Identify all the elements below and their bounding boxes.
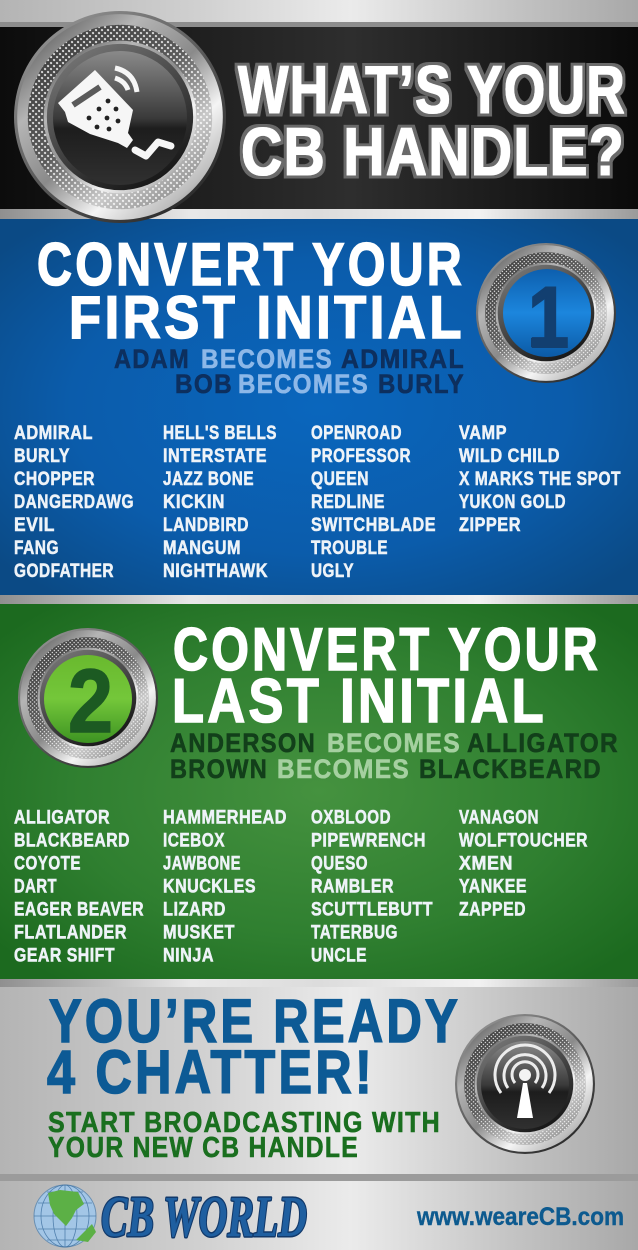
list: first initial names: VAMP: [459, 423, 507, 444]
list: first initial names: CHOPPER: [14, 469, 95, 490]
list: first initial names: DANGERDAWG: [14, 492, 134, 513]
logo: globe: [34, 1185, 96, 1247]
list: last initial names: OXBLOOD: [311, 808, 391, 828]
list: last initial names: PIPEWRENCH: [311, 830, 426, 852]
example text: last initial: BECOMES: [277, 754, 410, 784]
list: first initial names: WILD CHILD: [459, 446, 560, 467]
list: first initial names: SWITCHBLADE: [311, 515, 436, 536]
heading: you're ready 4 chatter: YOU’RE READY: [49, 987, 461, 1055]
heading: convert your first initial: CONVERT YOUR: [37, 231, 465, 298]
example text: last initial: BROWN: [170, 754, 268, 784]
panel: ready grey: [0, 979, 638, 1174]
heading: you're ready 4 chatter: 4 CHATTER!: [47, 1038, 375, 1106]
list: last initial names: GEAR SHIFT: [14, 946, 115, 966]
list: first initial names: FANG: [14, 538, 59, 559]
list: last initial names: [14, 808, 588, 966]
subheading: start broadcasting: YOUR NEW CB HANDLE: [48, 1132, 359, 1164]
list: first initial names: MANGUM: [163, 538, 241, 559]
list: first initial names: GODFATHER: [14, 561, 114, 582]
heading: you're ready 4 chatter: [47, 987, 461, 1106]
list: first initial names: QUEEN: [311, 469, 369, 490]
list: last initial names: NINJA: [163, 946, 214, 966]
list: first initial names: [14, 423, 621, 582]
example text: first initial: BECOMES: [238, 369, 369, 399]
icon: number 2 badge: 2: [68, 652, 113, 752]
subheading: start broadcasting: START BROADCASTING WITH: [48, 1107, 441, 1139]
heading: convert your first initial: [37, 231, 465, 351]
list: last initial names: MUSKET: [163, 922, 235, 944]
example text: first initial: [114, 344, 465, 399]
icon: number 1 badge: 1: [528, 270, 569, 366]
panel: step 1 blue: [0, 219, 638, 595]
list: last initial names: ZAPPED: [459, 900, 526, 920]
heading: convert your first initial: FIRST INITIAL: [69, 284, 465, 351]
list: first initial names: REDLINE: [311, 492, 385, 513]
list: last initial names: FLATLANDER: [14, 922, 127, 944]
list: first initial names: PROFESSOR: [311, 446, 411, 467]
list: first initial names: NIGHTHAWK: [163, 561, 268, 582]
example text: last initial: BECOMES: [327, 728, 461, 758]
example text: first initial: BURLY: [378, 369, 465, 399]
list: last initial names: RAMBLER: [311, 876, 394, 898]
list: last initial names: XMEN: [459, 854, 513, 874]
list: last initial names: YANKEE: [459, 876, 527, 898]
list: first initial names: INTERSTATE: [163, 446, 267, 467]
title: [238, 52, 626, 190]
example text: last initial: ANDERSON: [170, 728, 316, 758]
list: first initial names: LANDBIRD: [163, 515, 249, 536]
list: first initial names: ZIPPER: [459, 515, 521, 536]
heading: convert your last initial: [172, 616, 601, 736]
list: last initial names: VANAGON: [459, 808, 539, 828]
list: first initial names: UGLY: [311, 561, 354, 582]
example text: first initial: BECOMES: [201, 344, 333, 374]
icon: CB microphone badge: [14, 11, 226, 223]
list: first initial names: KICKIN: [163, 492, 225, 513]
example text: last initial: ALLIGATOR: [467, 728, 619, 758]
list: last initial names: COYOTE: [14, 854, 81, 874]
list: last initial names: DART: [14, 876, 57, 898]
list: last initial names: JAWBONE: [163, 854, 241, 874]
list: last initial names: UNCLE: [311, 946, 367, 966]
subheading: start broadcasting: [48, 1107, 441, 1164]
list: last initial names: BLACKBEARD: [14, 830, 130, 852]
example text: last initial: [170, 728, 619, 784]
list: last initial names: TATERBUG: [311, 922, 398, 944]
icon: number 1 badge: [476, 243, 616, 383]
example text: first initial: ADMIRAL: [341, 344, 465, 374]
list: first initial names: OPENROAD: [311, 423, 402, 444]
top silver strip: [0, 0, 638, 24]
icon: number 2 badge: [18, 628, 158, 768]
header black panel: [0, 22, 638, 219]
list: last initial names: WOLFTOUCHER: [459, 830, 588, 852]
list: last initial names: ICEBOX: [163, 830, 225, 852]
heading: convert your last initial: LAST INITIAL: [172, 667, 547, 736]
list: first initial names: TROUBLE: [311, 538, 388, 559]
example text: first initial: ADAM: [114, 344, 190, 374]
list: last initial names: ALLIGATOR: [14, 808, 110, 828]
list: last initial names: LIZARD: [163, 900, 226, 920]
list: last initial names: KNUCKLES: [163, 876, 256, 898]
icon: broadcast tower badge: [455, 1014, 595, 1154]
list: last initial names: EAGER BEAVER: [14, 900, 144, 920]
list: first initial names: HELL'S BELLS: [163, 423, 277, 444]
list: first initial names: ADMIRAL: [14, 423, 93, 444]
logo: CB WORLD wordmark: CB WORLD: [101, 1184, 307, 1249]
list: first initial names: YUKON GOLD: [459, 492, 566, 513]
list: first initial names: BURLY: [14, 446, 70, 467]
panel: footer: [0, 1174, 638, 1250]
example text: first initial: BOB: [175, 369, 233, 399]
panel: step 2 green: [0, 595, 638, 979]
list: last initial names: SCUTTLEBUTT: [311, 900, 433, 920]
list: last initial names: QUESO: [311, 854, 368, 874]
list: first initial names: EVIL: [14, 515, 55, 536]
example text: last initial: BLACKBEARD: [419, 754, 602, 784]
list: first initial names: JAZZ BONE: [163, 469, 254, 490]
list: last initial names: HAMMERHEAD: [163, 808, 287, 828]
